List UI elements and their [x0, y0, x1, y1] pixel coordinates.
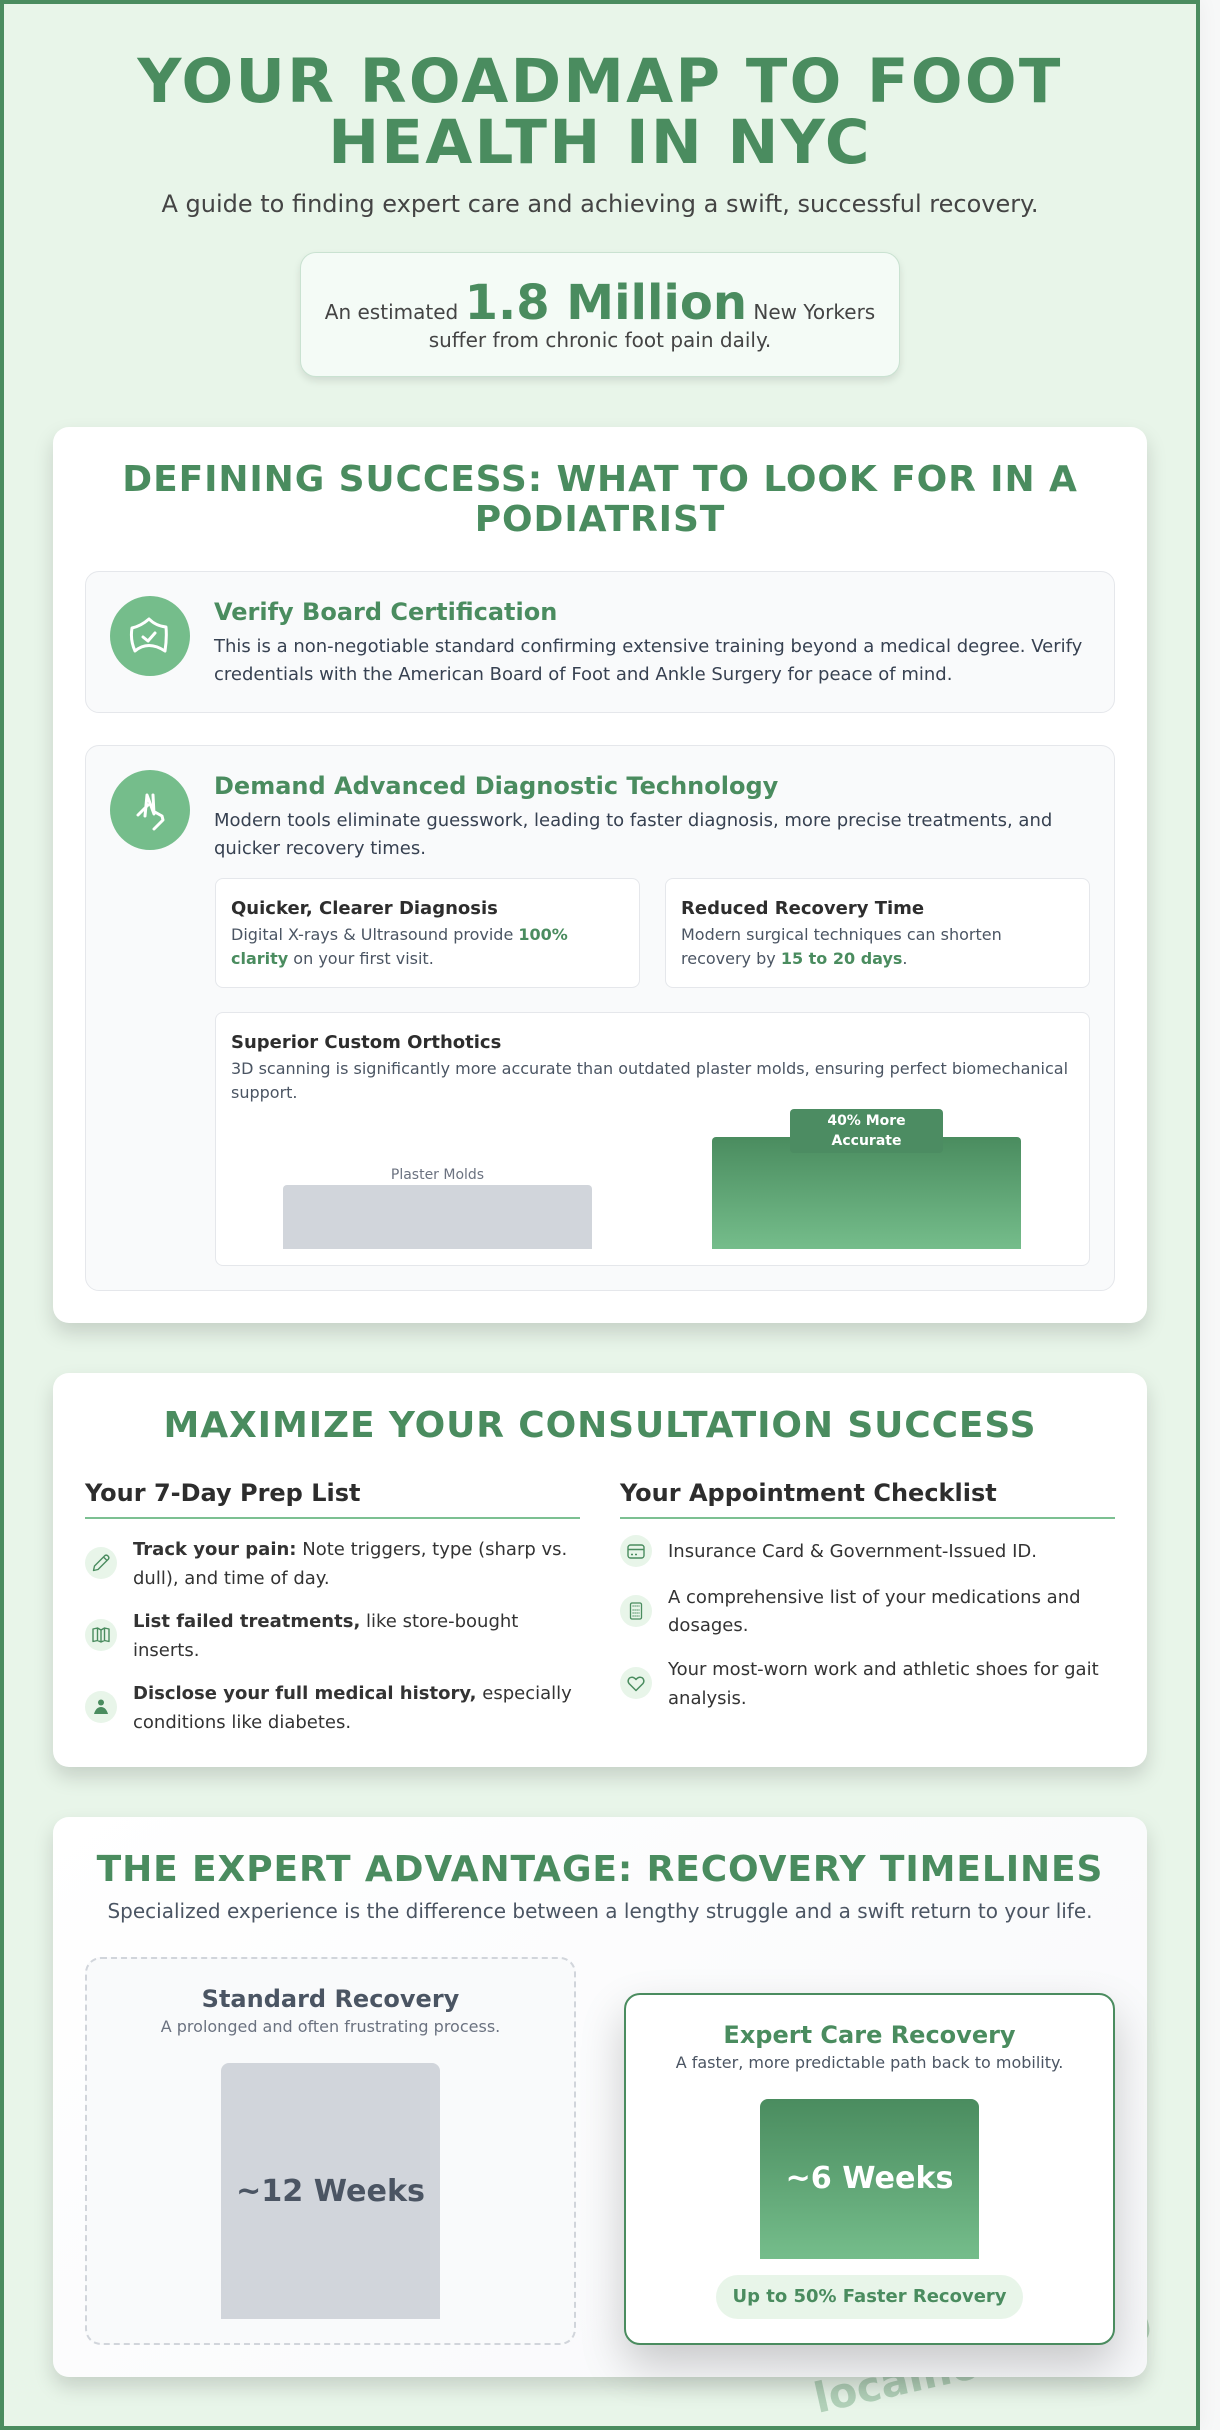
card body — [214, 636, 1082, 685]
item text: analysis. — [668, 1688, 747, 1709]
column heading: Your 7-Day Prep List — [85, 1479, 360, 1507]
sub-card: custom orthotics — [214, 1012, 1090, 1266]
callout: 40% more accurate: 40% More — [827, 1113, 906, 1129]
sub-card title: Quicker, Clearer Diagnosis — [231, 898, 498, 919]
item: track pain — [85, 1539, 567, 1589]
title: HEALTH IN NYC — [328, 108, 872, 178]
icon: diagnostic — [110, 770, 190, 850]
title: YOUR ROADMAP TO FOOT — [137, 47, 1063, 117]
card body: quicker recovery times. — [214, 838, 426, 859]
card: advanced diagnostic technology — [85, 745, 1115, 1291]
title — [136, 47, 1063, 178]
bar chart: 3D scan — [712, 1137, 1021, 1249]
card title: Demand Advanced Diagnostic Technology — [214, 772, 778, 800]
card body: credentials with the American Board of Foot and Ankle Surgery for peace of mind. — [214, 664, 952, 685]
panel: the expert advantage — [53, 1817, 1147, 2377]
card title: Expert Care Recovery — [723, 2021, 1016, 2049]
sub-card text: Digital X-rays & Ultrasound provide 100% — [231, 924, 568, 944]
bar: 6 weeks — [760, 2099, 979, 2259]
item text — [133, 1611, 518, 1661]
icon: person — [85, 1691, 117, 1723]
card subtitle: A faster, more predictable path back to mobility. — [676, 2052, 1063, 2072]
sub-card: quicker diagnosis — [214, 878, 640, 988]
item text — [668, 1659, 1099, 1709]
heading: defining success: PODIATRIST — [475, 498, 725, 540]
item text: conditions like diabetes. — [133, 1712, 351, 1733]
item text — [133, 1683, 572, 1733]
callout: 40% more accurate — [790, 1109, 943, 1153]
stat callout: 1.8 Million — [300, 252, 900, 377]
watermark: localhost: localhost:8000 — [809, 2300, 1156, 2422]
icon: pencil — [85, 1547, 117, 1579]
sub-card text: clarity on your first visit. — [231, 948, 434, 968]
card body: This is a non-negotiable standard confirming extensive training beyond a medical degree. Verify — [214, 636, 1082, 656]
icon: heart — [620, 1667, 652, 1699]
heading: defining success — [122, 458, 1078, 540]
bar label: Plaster Molds — [391, 1167, 484, 1183]
bar value: ~6 Weeks — [785, 2161, 954, 2196]
item: medical history — [85, 1683, 572, 1733]
sub-card text: Modern surgical techniques can shorten — [681, 924, 1002, 944]
subtitle: A guide to finding expert care and achieving a swift, successful recovery. — [161, 190, 1039, 218]
callout: 40% more accurate: Accurate — [832, 1133, 901, 1149]
item text: dull), and time of day. — [133, 1568, 330, 1589]
item text: inserts. — [133, 1640, 199, 1661]
item: medications — [620, 1587, 1081, 1636]
stat text: An estimated 1.8 Million New Yorkers — [325, 274, 875, 330]
item text: A comprehensive list of your medications and — [668, 1587, 1081, 1608]
stat text: suffer from chronic foot pain daily. — [429, 328, 771, 352]
item text: Your most-worn work and athletic shoes for gait — [668, 1659, 1099, 1680]
item text — [668, 1587, 1081, 1636]
sub-card text — [231, 1058, 1068, 1102]
sub-card title: Superior Custom Orthotics — [231, 1032, 501, 1053]
item text: List failed treatments, like store-bought — [133, 1611, 518, 1632]
sub-card text — [231, 924, 568, 968]
icon: calculator — [620, 1595, 652, 1627]
card body: Modern tools eliminate guesswork, leading to faster diagnosis, more precise treatments, and — [214, 810, 1052, 830]
card: expert care recovery — [624, 1993, 1115, 2345]
heading: expert advantage: THE EXPERT ADVANTAGE: RECOVERY TIMELINES — [97, 1848, 1103, 1890]
item: failed treatments — [85, 1611, 518, 1661]
intro text: Specialized experience is the difference between a lengthy struggle and a swift return to your life. — [107, 1899, 1093, 1923]
column: appointment checklist — [620, 1479, 1115, 1709]
panel: defining success — [53, 427, 1147, 1323]
heading: defining success: DEFINING SUCCESS: WHAT TO LOOK FOR IN A — [122, 458, 1078, 500]
icon: shield check — [110, 596, 190, 676]
card: verify board certification — [85, 571, 1115, 713]
heading: maximize consultation: MAXIMIZE YOUR CONSULTATION SUCCESS — [164, 1405, 1036, 1446]
icon: card — [620, 1535, 652, 1567]
card subtitle: A prolonged and often frustrating process. — [161, 2016, 500, 2036]
sub-card title: Reduced Recovery Time — [681, 898, 924, 919]
card title: Verify Board Certification — [214, 598, 557, 626]
item text: Disclose your full medical history, especially — [133, 1683, 572, 1704]
card: standard recovery — [85, 1957, 576, 2345]
bar chart: plaster molds — [283, 1167, 592, 1249]
item text: Insurance Card & Government-Issued ID. — [668, 1541, 1037, 1562]
sub-card text: recovery by 15 to 20 days. — [681, 948, 908, 968]
badge: 50% faster — [716, 2275, 1023, 2319]
item text — [133, 1539, 567, 1589]
card body — [214, 810, 1052, 859]
bar: 12 weeks — [221, 2063, 440, 2319]
badge: 50% faster: Up to 50% Faster Recovery — [732, 2286, 1007, 2307]
column: 7-day prep list — [84, 1479, 580, 1733]
item: insurance card — [620, 1535, 1037, 1567]
bar: plaster — [283, 1185, 592, 1249]
card title: Standard Recovery — [202, 1985, 459, 2013]
sub-card: reduced recovery time — [664, 878, 1090, 988]
icon: map — [85, 1619, 117, 1651]
item: shoes — [620, 1659, 1099, 1709]
item text: dosages. — [668, 1615, 748, 1636]
sub-card text: support. — [231, 1082, 298, 1102]
sub-card text — [681, 924, 1002, 968]
item text: Track your pain: Note triggers, type (sharp vs. — [133, 1539, 567, 1560]
column heading: Your Appointment Checklist — [620, 1479, 997, 1507]
sub-card text: 3D scanning is significantly more accurate than outdated plaster molds, ensuring perfect biomechanical — [231, 1058, 1068, 1078]
bar value: ~12 Weeks — [236, 2174, 425, 2209]
panel: maximize your consultation — [53, 1373, 1147, 1767]
